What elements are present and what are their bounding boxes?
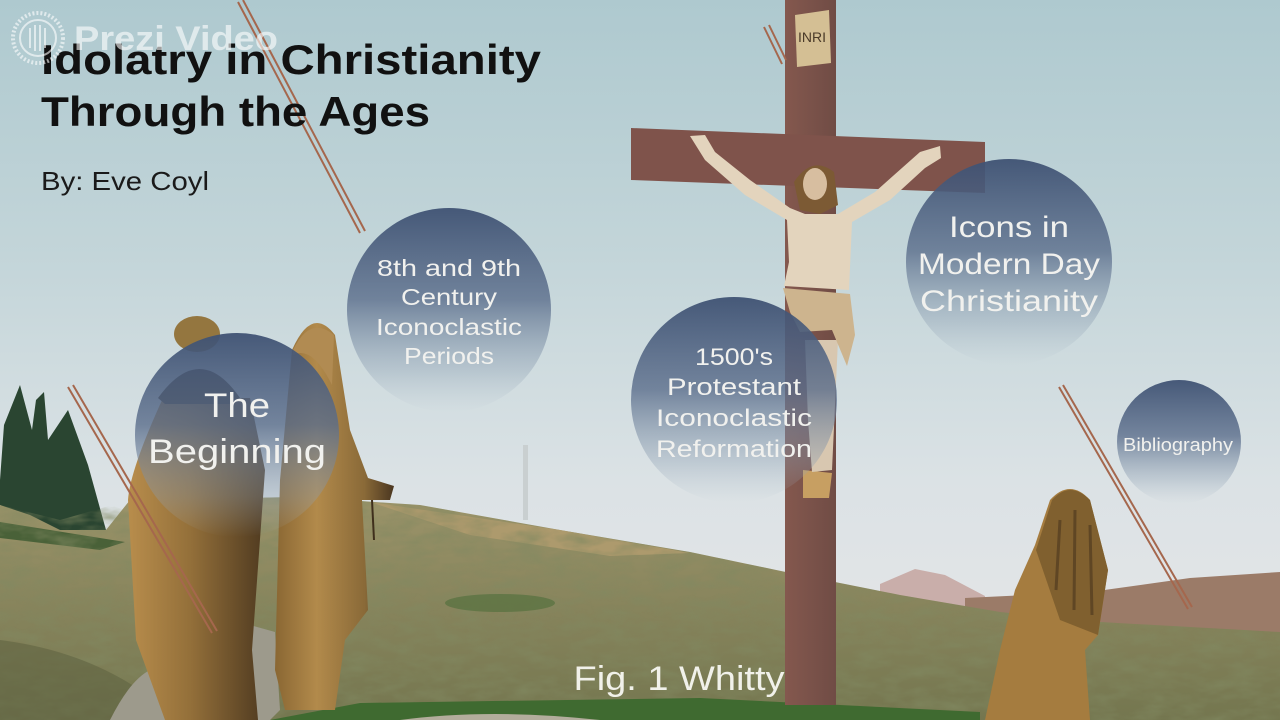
icon: Prezi logo	[13, 13, 63, 63]
cross	[631, 0, 985, 705]
watermark: Prezi Video: Prezi Video	[74, 20, 278, 58]
bubble: 8th and 9th Century Iconoclastic Periods: 8th and 9th	[377, 255, 521, 281]
rosary	[372, 500, 374, 540]
title: Through the Ages	[41, 88, 430, 135]
statue: middle figure	[275, 323, 394, 710]
background: tree group	[0, 385, 106, 532]
bubble: Icons in Modern Day Christianity: Modern Day	[918, 248, 1100, 281]
background: distant hills	[880, 569, 1280, 650]
bubble: 8th and 9th Century Iconoclastic Periods	[347, 208, 551, 412]
bubble: 8th and 9th Century Iconoclastic Periods: Century	[401, 284, 498, 310]
bubble: Icons in Modern Day Christianity	[906, 159, 1112, 365]
background: distant pylon	[523, 445, 528, 520]
statue: kneeling figure right	[985, 489, 1108, 720]
bubble: 1500's Protestant Iconoclastic Reformation: Iconoclastic	[656, 405, 812, 432]
bubble: The Beginning: Beginning	[148, 433, 326, 471]
bubble: 8th and 9th Century Iconoclastic Periods: Periods	[404, 343, 494, 369]
bubble: 1500's Protestant Iconoclastic Reformation: Reformation	[656, 436, 812, 463]
statue: Christ on the cross	[690, 135, 941, 472]
title: Idolatry in Christianity	[41, 36, 542, 83]
background: grassy hill	[0, 490, 1280, 720]
statue: left figure group	[128, 316, 265, 720]
bubble: 1500's Protestant Iconoclastic Reformation: Protestant	[667, 374, 801, 401]
bubble: The Beginning: The	[204, 387, 270, 425]
bubble: Bibliography: Bibliography	[1123, 435, 1233, 455]
title	[41, 36, 542, 135]
bubble: Icons in Modern Day Christianity: Christianity	[920, 285, 1098, 318]
bubble: The Beginning	[135, 333, 339, 537]
figure caption: Fig. 1 Whitty	[574, 660, 784, 698]
author byline: By: Eve Coyl	[41, 166, 209, 196]
watermark: Prezi Video	[13, 13, 278, 63]
bubble: 1500's Protestant Iconoclastic Reformation: 1500's	[695, 344, 773, 371]
icon: INRI plaque: INRI	[798, 29, 826, 45]
bubble: 8th and 9th Century Iconoclastic Periods: Iconoclastic	[376, 314, 522, 340]
bubble: Icons in Modern Day Christianity: Icons in	[949, 211, 1069, 244]
bubble: 1500's Protestant Iconoclastic Reformation	[631, 297, 837, 503]
decorative diagonal lines	[68, 0, 1192, 633]
icon: INRI plaque	[795, 10, 831, 67]
bubble: Bibliography	[1117, 380, 1241, 504]
